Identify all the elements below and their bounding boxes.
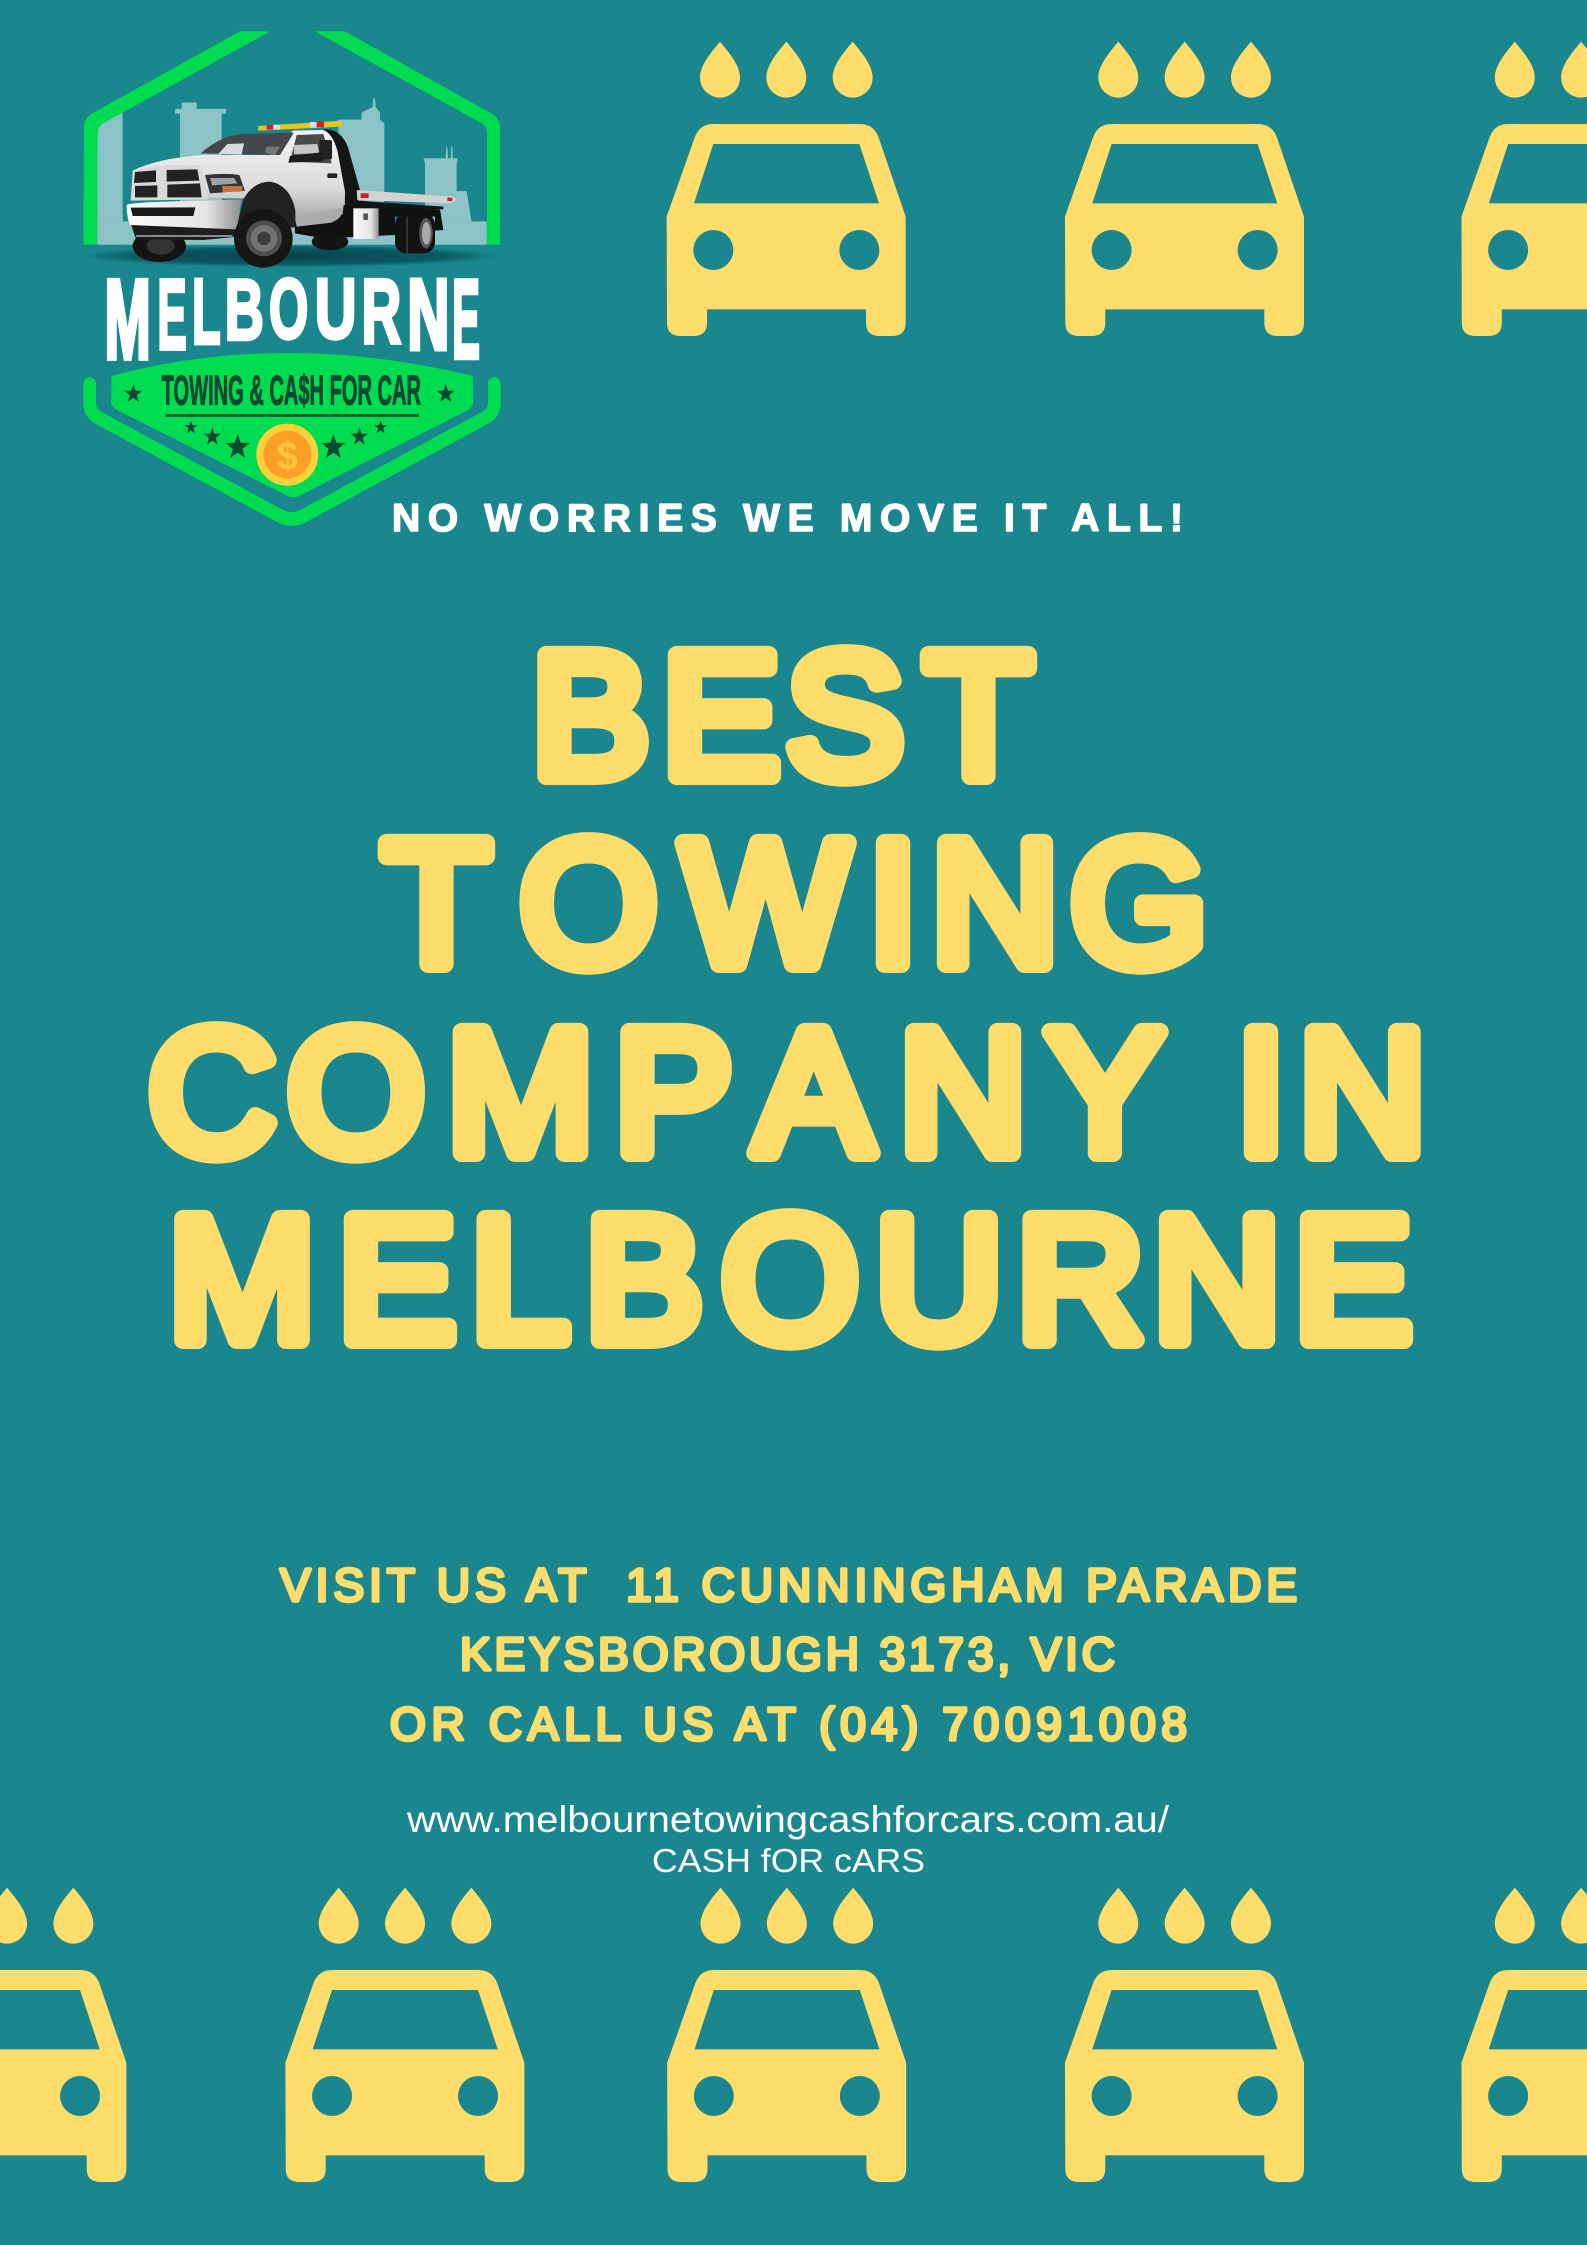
logo wordmark MELBOURNE bbox=[105, 256, 480, 382]
title line: COMPANY IN: COMPANY IN bbox=[148, 995, 1426, 1191]
cash for cars line: CASH fOR cARS bbox=[652, 1842, 925, 1879]
skyline base band bbox=[97, 221, 487, 245]
icon: car wash bottom 1 bbox=[0, 1888, 126, 2182]
logo: Melbourne Towing and Cash for Car badge bbox=[82, 31, 500, 519]
phone line: OR CALL US AT (04) 70091008 bbox=[390, 1698, 1187, 1750]
title line: TOWING: TOWING bbox=[383, 806, 1207, 1002]
address line 2: KEYSBOROUGH 3173, VIC bbox=[460, 1628, 1115, 1680]
bottom row of car wash icons bbox=[0, 1888, 1587, 2182]
skyline silhouette bbox=[97, 98, 487, 245]
grille bbox=[131, 165, 208, 201]
main title bbox=[148, 618, 1426, 1378]
icon: car wash top 1 bbox=[667, 42, 906, 336]
side window and mirror bbox=[290, 134, 332, 163]
logo wordmark MELBOURNE: R bbox=[361, 260, 401, 363]
windshield bbox=[201, 133, 294, 155]
icon: car wash bottom 4 bbox=[1065, 1888, 1304, 2182]
banner stars bbox=[124, 384, 455, 458]
green banner bbox=[111, 353, 473, 497]
logo upper hexagon and skyline bbox=[83, 31, 500, 245]
roof light bar bbox=[258, 121, 343, 131]
hexagon top outline bbox=[83, 31, 500, 245]
shield outline bbox=[90, 384, 494, 519]
ground shadow bbox=[82, 245, 498, 267]
icon: car wash top 2 bbox=[1065, 42, 1304, 336]
website url: www.melbournetowingcashforcars.com.au/ bbox=[406, 1799, 1170, 1840]
logo wordmark MELBOURNE: O bbox=[269, 262, 308, 357]
tagline: NO WORRIES WE MOVE IT ALL! bbox=[392, 497, 1183, 540]
headache rack bbox=[323, 129, 360, 192]
logo wordmark MELBOURNE: U bbox=[315, 262, 357, 357]
flatbed bbox=[345, 189, 443, 209]
icon: car wash bottom 2 bbox=[285, 1888, 524, 2182]
icon: car wash bottom 3 bbox=[667, 1888, 906, 2182]
title line: BEST: BEST bbox=[532, 618, 1032, 814]
headlight bbox=[205, 174, 245, 193]
coin bbox=[256, 424, 318, 486]
top row of car wash icons bbox=[667, 42, 1587, 336]
icon: car wash top 3 bbox=[1461, 42, 1587, 336]
chassis bbox=[295, 205, 443, 238]
door handle bbox=[327, 173, 337, 178]
rocker panel bbox=[297, 207, 343, 227]
icon: car wash bottom 5 bbox=[1461, 1888, 1587, 2182]
banner text: TOWING & CA$H FOR CAR bbox=[162, 368, 421, 414]
title line: MELBOURNE: MELBOURNE bbox=[169, 1182, 1412, 1378]
logo lower shield bbox=[90, 353, 494, 519]
website block bbox=[406, 1799, 1170, 1879]
left front wheel bbox=[133, 230, 186, 262]
address line 1: VISIT US AT 11 CUNNINGHAM PARADE bbox=[280, 1559, 1297, 1611]
logo wordmark MELBOURNE: E bbox=[157, 259, 187, 370]
cab and hood body bbox=[133, 130, 345, 227]
front bumper bbox=[131, 223, 238, 240]
logo wordmark MELBOURNE: E bbox=[452, 256, 480, 382]
toolbox bbox=[353, 208, 379, 239]
address and phone block bbox=[280, 1559, 1297, 1750]
logo wordmark MELBOURNE: L bbox=[192, 260, 221, 364]
wheel arch bbox=[237, 182, 295, 227]
rear wheels bbox=[395, 213, 435, 253]
coin: $ bbox=[277, 434, 298, 479]
logo wordmark MELBOURNE: M bbox=[105, 256, 151, 382]
logo wordmark MELBOURNE: B bbox=[225, 261, 264, 358]
tow truck illustration bbox=[127, 121, 457, 268]
front wheel bbox=[234, 209, 293, 268]
logo wordmark MELBOURNE: N bbox=[407, 259, 449, 370]
